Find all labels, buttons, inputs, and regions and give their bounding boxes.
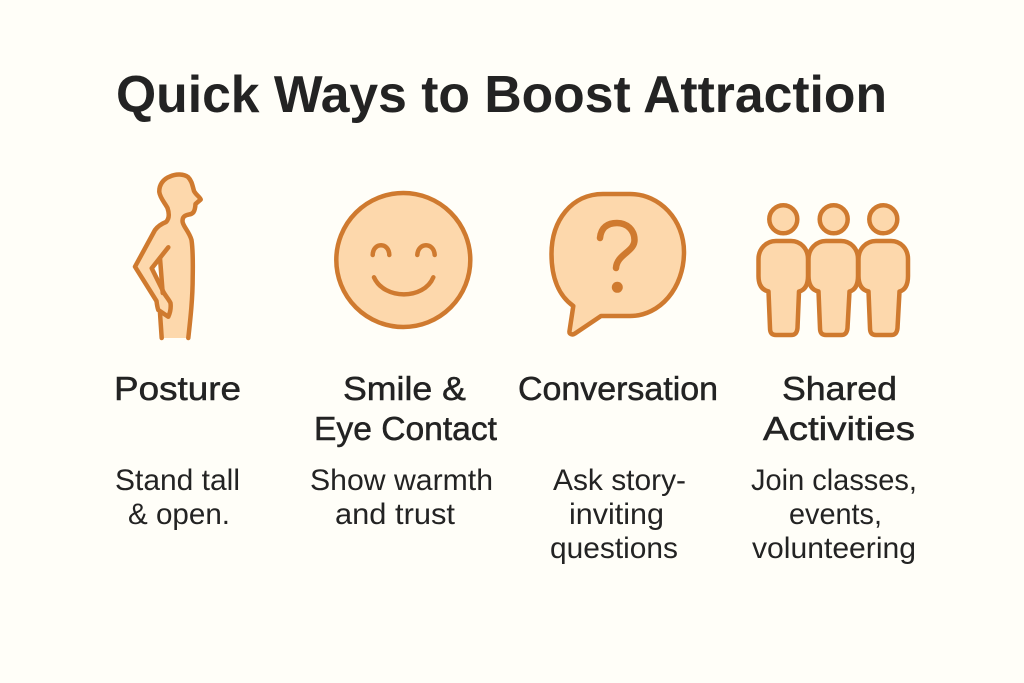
heading: smile and eye contact xyxy=(314,370,497,447)
description: conversation: Ask story- xyxy=(553,464,686,497)
panel: shared activities xyxy=(751,205,917,565)
description: conversation xyxy=(550,464,686,565)
heading: posture: Posture xyxy=(114,370,241,407)
description: posture: Stand tall xyxy=(115,464,240,497)
icon: standing person in profile xyxy=(135,174,201,338)
heading: shared activities xyxy=(763,370,915,447)
description: conversation: inviting xyxy=(569,498,664,531)
heading: smile and eye contact: Smile & xyxy=(343,370,466,407)
panel: smile and eye contact xyxy=(310,193,497,531)
description: smile and eye contact xyxy=(310,464,493,531)
description: smile and eye contact: Show warmth xyxy=(310,464,493,497)
heading: shared activities: Activities xyxy=(763,410,915,447)
description: posture xyxy=(115,464,240,531)
panel: conversation xyxy=(518,194,718,565)
heading: smile and eye contact: Eye Contact xyxy=(314,410,497,447)
description: posture: & open. xyxy=(128,498,230,531)
description: shared activities: volunteering xyxy=(752,532,916,565)
icon: smiling face xyxy=(336,193,470,327)
description: smile and eye contact: and trust xyxy=(335,498,456,531)
panel: posture xyxy=(114,174,241,531)
description: shared activities xyxy=(751,464,917,565)
icon: group of three people xyxy=(758,205,908,335)
heading: shared activities: Shared xyxy=(782,370,897,407)
description: shared activities: events, xyxy=(789,498,882,531)
heading: conversation: Conversation xyxy=(518,370,718,407)
description: conversation: questions xyxy=(550,532,678,565)
title: Quick Ways to Boost Attraction xyxy=(116,66,887,124)
description: shared activities: Join classes, xyxy=(751,464,917,497)
icon: speech bubble with question mark xyxy=(552,194,684,334)
